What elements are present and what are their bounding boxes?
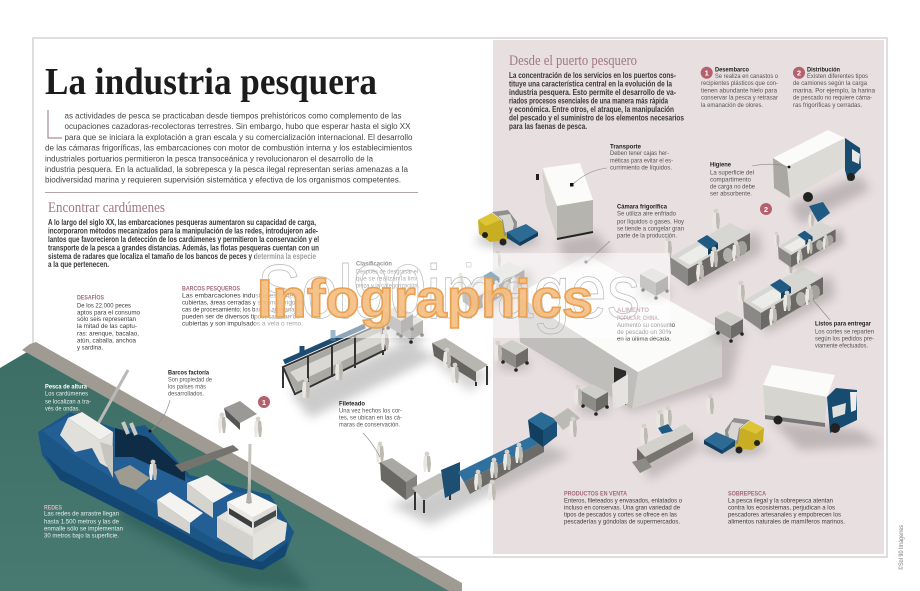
intro text: as actividades de pesca se practicaban desde tiempos prehistóricos como complemento de las [64, 110, 402, 120]
illustration: truck lower right [763, 365, 880, 450]
note: listos para entregar [815, 320, 874, 350]
note: fileteado: Una vez hechos los cor- [339, 408, 402, 414]
note: barcos factoria: los países más [168, 384, 207, 390]
illustration: forklift lower [702, 418, 766, 456]
note: sobrepesca: SOBREPESCA [728, 490, 766, 498]
note: barcos factoria [168, 370, 212, 398]
gangway [175, 445, 239, 472]
note: transporte: Transporte [610, 144, 641, 150]
container 1 [187, 475, 233, 518]
hull dark base [45, 455, 288, 570]
text: desde el puerto pesquero: industria pesquera. Esto permite el desarrollo de va- [509, 88, 676, 97]
note: productos en venta: Enteros, fileteados y envasados, enlatados o [564, 498, 682, 504]
note: popular china: de pescado un 30% [617, 329, 671, 336]
note: transporte: méticas para evitar el es- [610, 158, 673, 164]
bulwark [115, 428, 185, 481]
title: La industria pesquera [45, 61, 377, 103]
door [612, 367, 628, 410]
aft superstructure [60, 412, 113, 478]
note: camara frigorifica [617, 204, 685, 240]
illustration: bottom conveyor line [376, 408, 580, 525]
note: popular china [617, 307, 675, 342]
note: higiene: ser absorbente. [710, 190, 752, 198]
note: barcos factoria: Barcos factoría [168, 370, 209, 376]
note: redes: REDES [44, 504, 62, 512]
note: productos en venta: tipos de pescados y cortes se ofrece en las [564, 512, 678, 518]
note: pesca de altura: vés de ondas. [45, 406, 80, 412]
note: transporte: currimiento de líquidos. [610, 164, 672, 172]
intro text: industriales portuarios permitieron la pesca transoceánica y revolucionaron el desarrollo de la [45, 153, 373, 163]
intro text: industria pesquera. En la actualidad, la sobrepesca y la pesca ilegal representan serias amenazas a la [45, 164, 408, 174]
belt [458, 433, 544, 482]
note: redes: Las redes de arrastre llegan [44, 510, 119, 518]
note: sobrepesca: La pesca ilegal y la sobrepesca atentan [728, 498, 833, 504]
note: popular china: Aumentó su consumo [617, 322, 675, 329]
note: desafios: atún, caballa, anchoa [77, 338, 136, 344]
note: desafios: DESAFÍOS [77, 292, 104, 302]
note: distribucion: Distribución [807, 66, 840, 74]
note: sobrepesca: contra los ecosistemas, perjudican a los [728, 504, 836, 512]
illustration: cold chamber building [517, 255, 740, 412]
note: popular china: POPULAR: CHINA. [617, 315, 659, 322]
note: barcos pesqueros: cubiertas, áreas cerradas y sistemas frigorífi- [182, 300, 304, 306]
note: popular china: en la última década. [617, 336, 671, 342]
note: popular china: ALIMENTO [617, 307, 649, 314]
note: camara frigorifica: parte de la producción. [617, 232, 677, 240]
note: sobrepesca: pescadores artesanales y empobrecen los [728, 512, 842, 518]
note: pesca de altura: se localizan a tra- [45, 398, 91, 406]
badge: 2 [760, 203, 772, 215]
illustration: forklift upper [476, 210, 540, 248]
deck crates [114, 465, 150, 490]
leader: higiene [752, 164, 790, 168]
note: distribucion: Existen diferentes tipos [807, 73, 869, 80]
note: distribucion [793, 66, 875, 109]
text: encontrar cardumenes: lantos que favorecieron la detección de los cardúmenes y permitieron la conservación y el [48, 235, 319, 244]
note: productos en venta [564, 490, 682, 526]
note: desafios: ras: arenque, bacalao, [77, 330, 139, 338]
note: camara frigorifica: por líquidos o gases. Hoy [617, 218, 685, 226]
water [0, 349, 462, 591]
note: desembarco: Se realiza en canastos o [715, 73, 778, 80]
sea and quay [0, 342, 462, 591]
watermark: infographics: Infographics [257, 269, 593, 329]
text: desde el puerto pesquero: La concentración de los servicios en los puertos cons- [509, 71, 676, 80]
note: listos para entregar: según los pedidos pre- [815, 336, 874, 342]
sailor [149, 460, 157, 480]
note: listos para entregar: Los cortes se reparten [815, 328, 874, 336]
note: barcos factoria: desarrollados. [168, 390, 204, 398]
quay edge [22, 342, 462, 591]
note: barcos pesqueros: cubiertas y son impulsados a vela o remo. [182, 320, 303, 328]
roof [517, 255, 722, 372]
text: encontrar cardumenes: a la que pertenecen. [48, 260, 109, 269]
building shadow [520, 330, 740, 412]
note: distribucion: de pescado no requiere cáma- [793, 94, 872, 102]
note: distribucion: ras frigoríficas y cerradas. [793, 102, 862, 109]
note: listos para entregar: Listos para entregar [815, 320, 871, 328]
intro text: de las cámaras frigoríficas, las embarcaciones con motor de combustión interna y los establecimientos [45, 143, 412, 153]
note: sobrepesca [728, 490, 845, 526]
note: barcos pesqueros: pueden ser de diversos tipos, carecen de [182, 314, 300, 320]
note: distribucion: 2 [797, 68, 801, 78]
note: listos para entregar: viamente efectuados. [815, 342, 868, 350]
illustration: carts around building [494, 268, 746, 416]
note: higiene: de carga no debe [710, 184, 755, 190]
intro text: ocupaciones cazadoras-recolectoras terrestres. Sin embargo, hubo que esperar hasta el siglo XX [64, 121, 411, 131]
illustration: bottom table [632, 406, 700, 480]
note: barcos pesqueros [182, 286, 304, 328]
text: encontrar cardumenes: transporte de la pesca a grandes distancias. Además, las flotas pesqueras cuentan con un [48, 243, 319, 252]
note: desembarco [701, 66, 779, 109]
note: desafios [77, 292, 140, 352]
text: desde el puerto pesquero [509, 71, 685, 131]
drop cap L [48, 110, 62, 138]
intro text [45, 110, 413, 185]
note: higiene [710, 162, 755, 198]
credit: ©Sol 90 Imágenes [897, 524, 905, 570]
note: clasificacion: Clasificación [356, 260, 392, 268]
badge: 2: 2 [764, 205, 768, 214]
left wall [517, 295, 638, 409]
illustration: classification station [457, 251, 534, 313]
heading: encontrar cardumenes: Encontrar cardúmenes [48, 200, 165, 216]
badge: 1 [258, 396, 270, 408]
note: redes: hasta 1.500 metros y las de [44, 518, 119, 526]
text: encontrar cardumenes: incorporaron métodos mecanizados para la manipulación de las redes, introdujeron ade- [48, 226, 318, 236]
note: fileteado: Fileteado [339, 400, 365, 408]
note: productos en venta: PRODUCTOS EN VENTA [564, 490, 627, 498]
note: fileteado [339, 400, 402, 428]
note: desembarco: recipientes plásticos que con- [701, 80, 778, 87]
note: camara frigorifica: se tiende a congelar gran [617, 226, 684, 232]
note: desembarco: tienen abundante hielo para [701, 88, 777, 94]
leader: camara frigorifica [584, 241, 610, 264]
note: desafios: sólo seis representan [77, 316, 136, 323]
text: desde el puerto pesquero: y económica. Entre otros, el atraque, la manipulación [509, 105, 674, 114]
text: desde el puerto pesquero: del pescado y el suministro de los elementos necesarios [509, 114, 685, 122]
table [412, 473, 452, 500]
note: distribucion: marina. Por ejemplo, la harina [793, 88, 875, 94]
leader: transporte [570, 168, 607, 186]
note: barcos pesqueros: Las embarcaciones industriales tienen [182, 292, 297, 300]
note: higiene: compartimento [710, 176, 751, 184]
note: clasificacion: que se realizan la lim- [356, 276, 418, 282]
note: redes: enmalle sólo se implementan [44, 526, 123, 532]
illustration: unloading circle with workers [216, 396, 264, 444]
illustration: crates [382, 306, 426, 344]
end table [553, 408, 580, 430]
note: pesca de altura [45, 384, 91, 412]
note: pesca de altura: Pesca de altura [45, 384, 87, 390]
watermark: sol90images outline: Sol90images [257, 250, 640, 335]
note: barcos factoria: Son propiedad de [168, 376, 212, 384]
text: encontrar cardumenes: A lo largo del siglo XX, las embarcaciones pesqueras aumentaron su capacidad de carga, [48, 218, 316, 227]
panel: desde el puerto pesquero background [493, 40, 884, 554]
intro text: biodiversidad marina y requieren supervisión sistemática y efectiva de los organismos competentes. [45, 175, 401, 185]
watermark veil [255, 253, 670, 338]
leader: barcos factoria [148, 400, 170, 432]
text: desde el puerto pesquero: tituye una característica central en la evolución de la [509, 80, 673, 88]
note: higiene: La superficie del [710, 170, 754, 176]
hull [38, 412, 294, 570]
note: desembarco: conservar la pesca y retrasar [701, 94, 779, 102]
text: encontrar cardumenes: sistema de radares que localiza el tamaño de los bancos de peces y determina la especie [48, 252, 317, 261]
note: higiene: Higiene [710, 162, 731, 168]
text: desde el puerto pesquero: riados procesos esenciales de una manera más rápida [509, 96, 669, 106]
note: sobrepesca: alimentos naturales de mamíferos marinos. [728, 518, 845, 526]
chimneys [123, 422, 136, 435]
note: clasificacion: Después de desgrasar el [356, 268, 418, 276]
heading: desde el puerto pesquero: Desde el puerto pesquero [509, 53, 637, 69]
machine [378, 458, 417, 500]
note: pesca de altura: Los cardúmenes [45, 390, 89, 398]
text: encontrar cardumenes [48, 218, 319, 269]
note: redes [44, 504, 123, 540]
text: desde el puerto pesquero: para las faenas de pesca. [509, 122, 587, 131]
note: productos en venta: incluso en conservas. Una gran variedad de [564, 504, 680, 512]
note: barcos pesqueros: BARCOS PESQUEROS [182, 286, 240, 292]
note: fileteado: tes, se ubican en las cá- [339, 414, 402, 422]
note: desembarco: la emanación de olores. [701, 102, 763, 109]
bridge [217, 444, 287, 560]
note: desafios: aptos para el consumo [77, 310, 140, 316]
note: fileteado: maras de conservación. [339, 422, 400, 428]
note: desafios: De los 22.000 peces [77, 302, 132, 310]
note: desafios: la mitad de las captu- [77, 323, 137, 330]
illustration: left table [432, 338, 490, 392]
note: distribucion: de camiones según la carga [793, 80, 867, 87]
container 2 [157, 492, 203, 534]
ship shadow [120, 480, 310, 591]
illustration: fishing ship [38, 370, 310, 591]
note: camara frigorifica: Se utiliza aire enfriado [617, 210, 676, 218]
note: desembarco: 1 [705, 68, 709, 78]
illustration: packing stations right [664, 202, 844, 333]
right wall [632, 330, 722, 409]
note: desafios: y sardina. [77, 344, 103, 352]
mast [98, 370, 128, 424]
note: transporte [610, 144, 673, 172]
note: redes: 30 metros bajo la superficie. [44, 532, 119, 540]
note: transporte: Deben tener cajas her- [610, 150, 669, 157]
badge: 1: 1 [262, 398, 266, 407]
illustration: left conveyor line [283, 323, 435, 418]
illustration: truck upper right [773, 130, 870, 225]
note: clasificacion [356, 260, 419, 290]
note: barcos pesqueros: cas de procesamiento; los barcos artesanales [182, 306, 303, 314]
note: desembarco: Desembarco [715, 66, 749, 74]
intro text: para que se iniciara la explotación a gran escala y su comercialización internacional. El desarrollo [64, 132, 413, 142]
note: productos en venta: pescaderías y góndolas de supermercados. [564, 518, 680, 526]
blue unit 2 [528, 412, 557, 447]
note: clasificacion: pieza y la categorización. [356, 282, 419, 290]
blue unit 1 [441, 462, 460, 498]
deck [42, 416, 288, 552]
note: camara frigorifica: Cámara frigorífica [617, 204, 667, 210]
illustration: truck back view [536, 163, 612, 265]
